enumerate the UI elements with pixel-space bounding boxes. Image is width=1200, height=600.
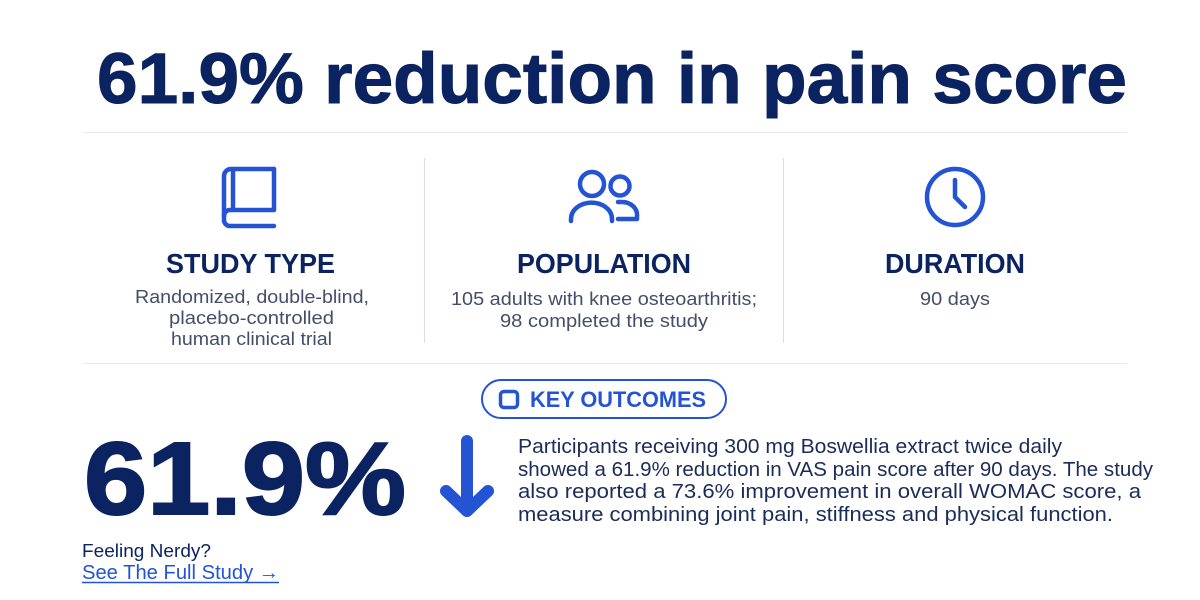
text: outcome paragraph: measure combining joint pain, stiffness and physical function.: [518, 504, 1113, 526]
text: outcome paragraph: also reported a 73.6% improvement in overall WOMAC score, a: [518, 481, 1142, 503]
badge label: KEY OUTCOMES: [530, 387, 706, 412]
text: population description: [451, 288, 757, 331]
text: outcome paragraph: Participants receiving 300 mg Boswellia extract twice daily: [518, 436, 1062, 458]
heading: population: POPULATION: [517, 248, 691, 279]
text: study type description: [135, 286, 369, 349]
icon: book: [224, 169, 274, 226]
title: 61.9% reduction in pain score: [97, 40, 1127, 119]
text: duration description: 90 days: [920, 288, 990, 309]
panel: duration: [885, 169, 1025, 309]
text: outcome paragraph: showed a 61.9% reduction in VAS pain score after 90 days. The study: [518, 459, 1153, 481]
badge: key outcomes: [482, 380, 726, 418]
text: population description: 98 completed the study: [500, 310, 709, 331]
panel: study type: [135, 169, 369, 349]
text: outcome paragraph: [518, 436, 1153, 526]
text: feeling nerdy: Feeling Nerdy?: [82, 541, 211, 561]
icon: down arrow: [446, 441, 488, 511]
panel: population: [451, 172, 757, 331]
text: study type description: placebo-controlled: [169, 307, 334, 328]
link: see the full study: See The Full Study →: [82, 561, 279, 584]
big statistic: 61.9%: [84, 421, 406, 536]
text: study type description: Randomized, double-blind,: [135, 286, 369, 307]
heading: duration: DURATION: [885, 248, 1025, 279]
icon: people: [571, 172, 637, 221]
text: population description: 105 adults with knee osteoarthritis;: [451, 288, 757, 309]
icon: square: [500, 392, 518, 408]
icon: clock: [927, 169, 983, 225]
heading: study type: STUDY TYPE: [166, 248, 335, 279]
text: study type description: human clinical trial: [171, 328, 332, 349]
